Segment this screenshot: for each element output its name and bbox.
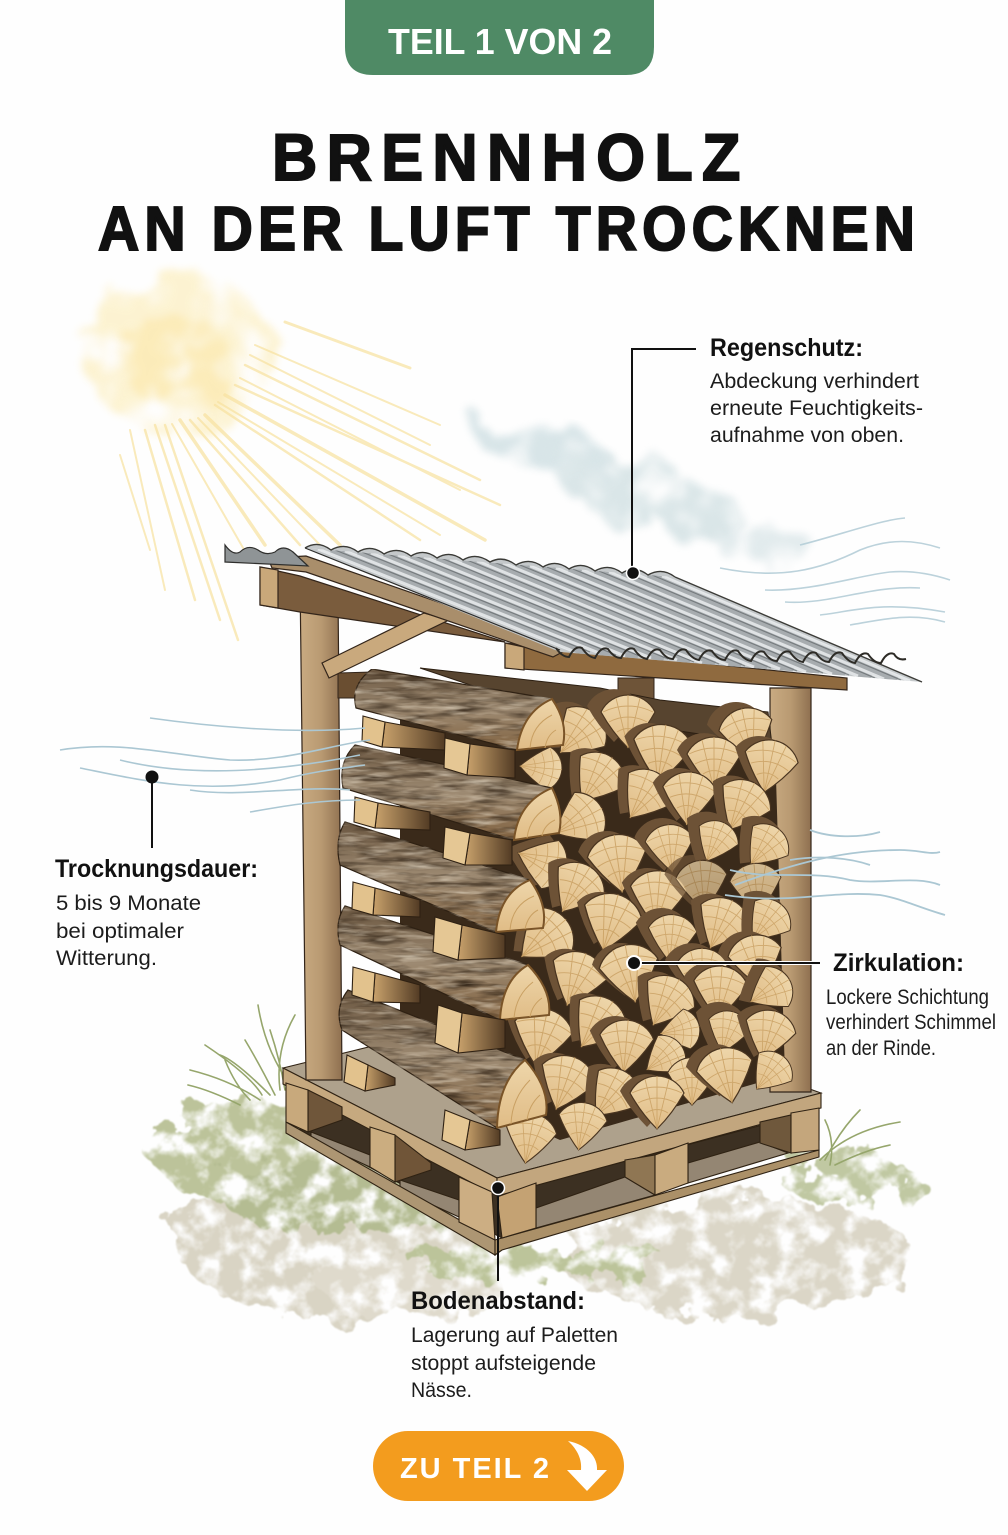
callout: Zirkulation bbox=[627, 949, 996, 1060]
middle post bbox=[618, 678, 654, 700]
wind lines left bbox=[60, 718, 370, 812]
callout: Regenschutz bbox=[626, 334, 923, 580]
pallet: bottom rails bbox=[286, 1122, 495, 1255]
wind lines upper right bbox=[720, 518, 950, 625]
title: AN DER LUFT TROCKNEN bbox=[98, 194, 915, 264]
lower left stub beam bbox=[338, 672, 372, 698]
square spacer blocks bbox=[344, 716, 515, 1150]
callout: Trocknungsdauer bbox=[55, 770, 258, 970]
large split logs bbox=[338, 669, 552, 1128]
callout: Trocknungsdauer: 5 bis 9 Monate bbox=[56, 891, 201, 915]
ground wash bbox=[150, 1005, 920, 1318]
icon: curved arrow down bbox=[567, 1441, 607, 1491]
header tab: Teil 1 von 2 bbox=[345, 0, 654, 75]
callout: Bodenabstand bbox=[411, 1182, 618, 1402]
callout: Regenschutz: Regenschutz: bbox=[710, 334, 863, 362]
cloud bbox=[472, 416, 815, 561]
pallet: top deck bbox=[283, 1000, 821, 1178]
title: BRENNHOLZ bbox=[272, 121, 740, 194]
wooden pallet bbox=[283, 1000, 821, 1255]
callout: Bodenabstand: Lagerung auf Paletten bbox=[411, 1323, 618, 1347]
roof frame beams bbox=[260, 556, 847, 690]
firewood stack bbox=[338, 668, 802, 1168]
right post bbox=[770, 688, 811, 1092]
corrugated metal roof bbox=[225, 544, 922, 682]
pallet: lower deck boards bbox=[311, 1132, 788, 1228]
callout: Zirkulation: Zirkulation: bbox=[833, 949, 964, 977]
header tab: Teil 1 von 2: TEIL 1 VON 2 bbox=[388, 21, 612, 62]
button: Zu Teil 2: ZU TEIL 2 bbox=[400, 1453, 549, 1485]
pallet: dark underside bbox=[300, 1085, 819, 1238]
callout: Bodenabstand: Bodenabstand: bbox=[411, 1287, 585, 1315]
left post bbox=[300, 578, 342, 1080]
wind lines right bbox=[725, 830, 945, 915]
callout: Bodenabstand: stoppt aufsteigende bbox=[411, 1351, 596, 1375]
callout: Trocknungsdauer: bei optimaler bbox=[56, 919, 184, 943]
callout: Trocknungsdauer: Trocknungsdauer: bbox=[55, 855, 258, 883]
button: Zu Teil 2 bbox=[373, 1431, 624, 1501]
callout: Trocknungsdauer: Witterung. bbox=[56, 946, 157, 970]
title bbox=[98, 121, 915, 264]
log cut faces bbox=[496, 699, 564, 1128]
callout: Zirkulation: an der Rinde. bbox=[826, 1036, 936, 1060]
sun illustration bbox=[85, 275, 500, 640]
callout: Regenschutz: aufnahme von oben. bbox=[710, 423, 904, 447]
pallet: blocks bbox=[308, 1090, 342, 1132]
callout: Regenschutz: Abdeckung verhindert bbox=[710, 369, 919, 393]
callout: Regenschutz: erneute Feuchtigkeits- bbox=[710, 396, 923, 420]
callout: Bodenabstand: Nässe. bbox=[411, 1378, 472, 1402]
